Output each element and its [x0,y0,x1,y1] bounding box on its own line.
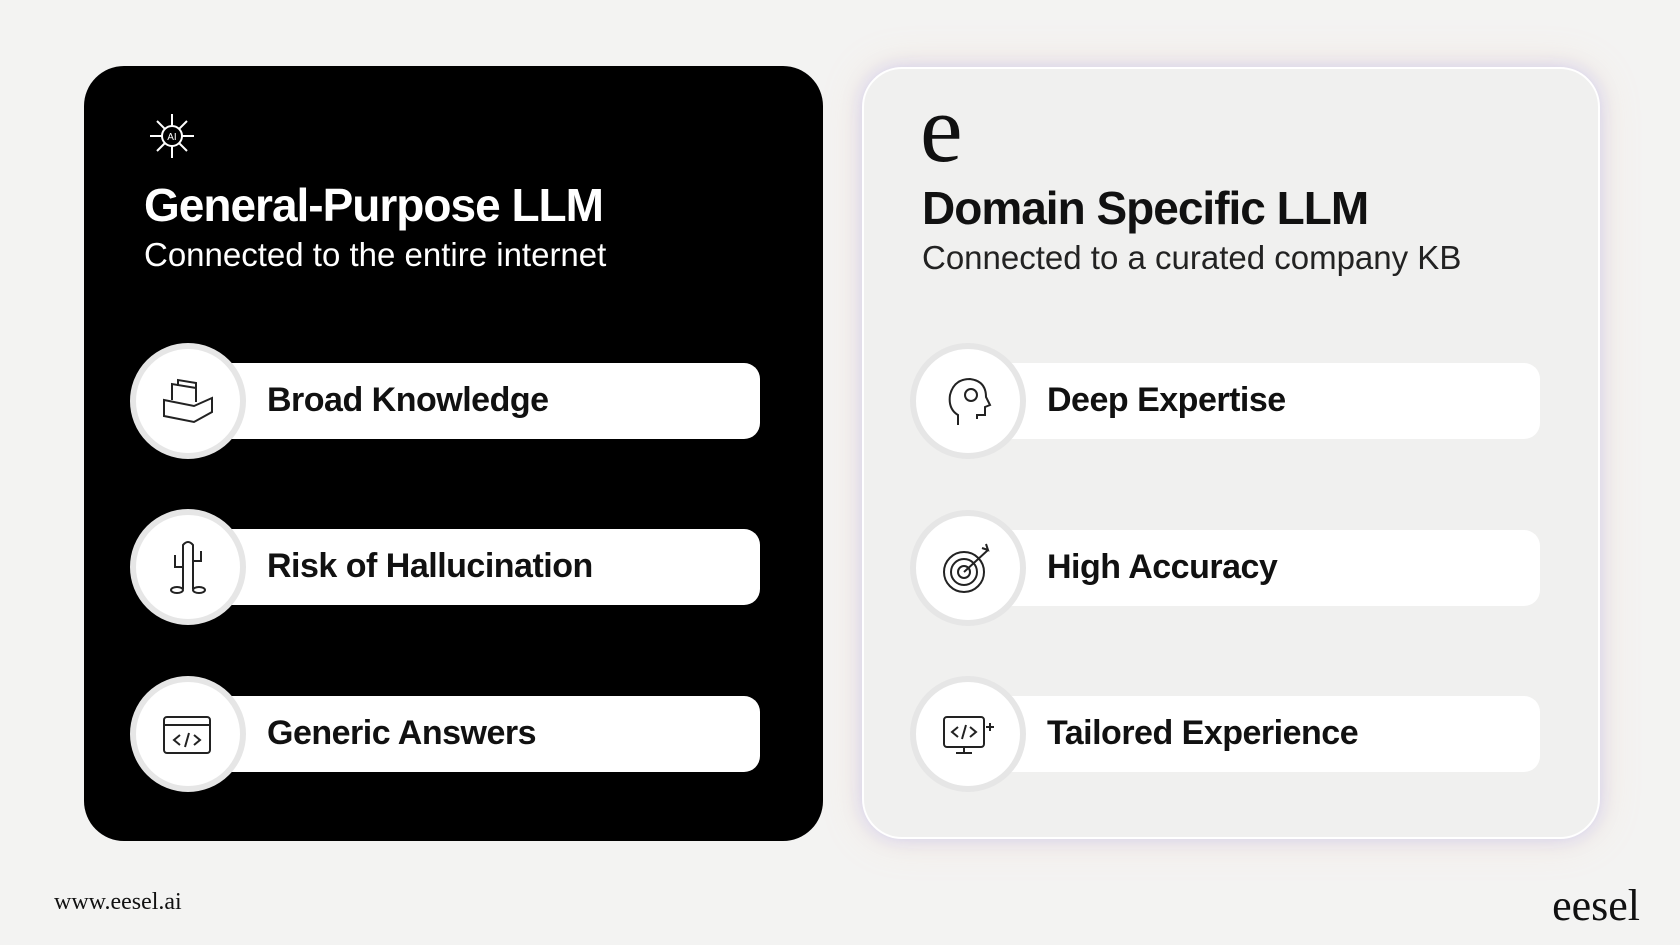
item: broad knowledge: Broad Knowledge [267,381,549,419]
item: generic answers [130,676,760,792]
item: risk of hallucination: Risk of Hallucination [267,547,593,585]
panel: general-purpose LLM [84,66,823,841]
item: tailored experience [910,676,1540,792]
panel: domain specific LLM [862,67,1600,839]
icon: AI chip: AI [167,132,177,143]
item: deep expertise [910,343,1540,459]
subtitle: Connected to a curated company KB [922,239,1461,276]
footer: eesel logo: eesel [1552,881,1640,930]
icon: AI chip [150,114,194,158]
item: high accuracy: High Accuracy [1047,548,1277,586]
icon: eesel logo e: e [920,75,963,182]
item: broad knowledge [130,343,760,459]
item: generic answers: Generic Answers [267,714,536,752]
heading: Domain Specific LLM [922,182,1368,234]
item: deep expertise: Deep Expertise [1047,381,1286,419]
item: tailored experience: Tailored Experience [1047,714,1358,752]
heading: General-Purpose LLM [144,179,603,231]
item: risk of hallucination [130,509,760,625]
subtitle: Connected to the entire internet [144,236,606,273]
item: high accuracy [910,510,1540,626]
footer: url: www.eesel.ai [54,889,182,915]
